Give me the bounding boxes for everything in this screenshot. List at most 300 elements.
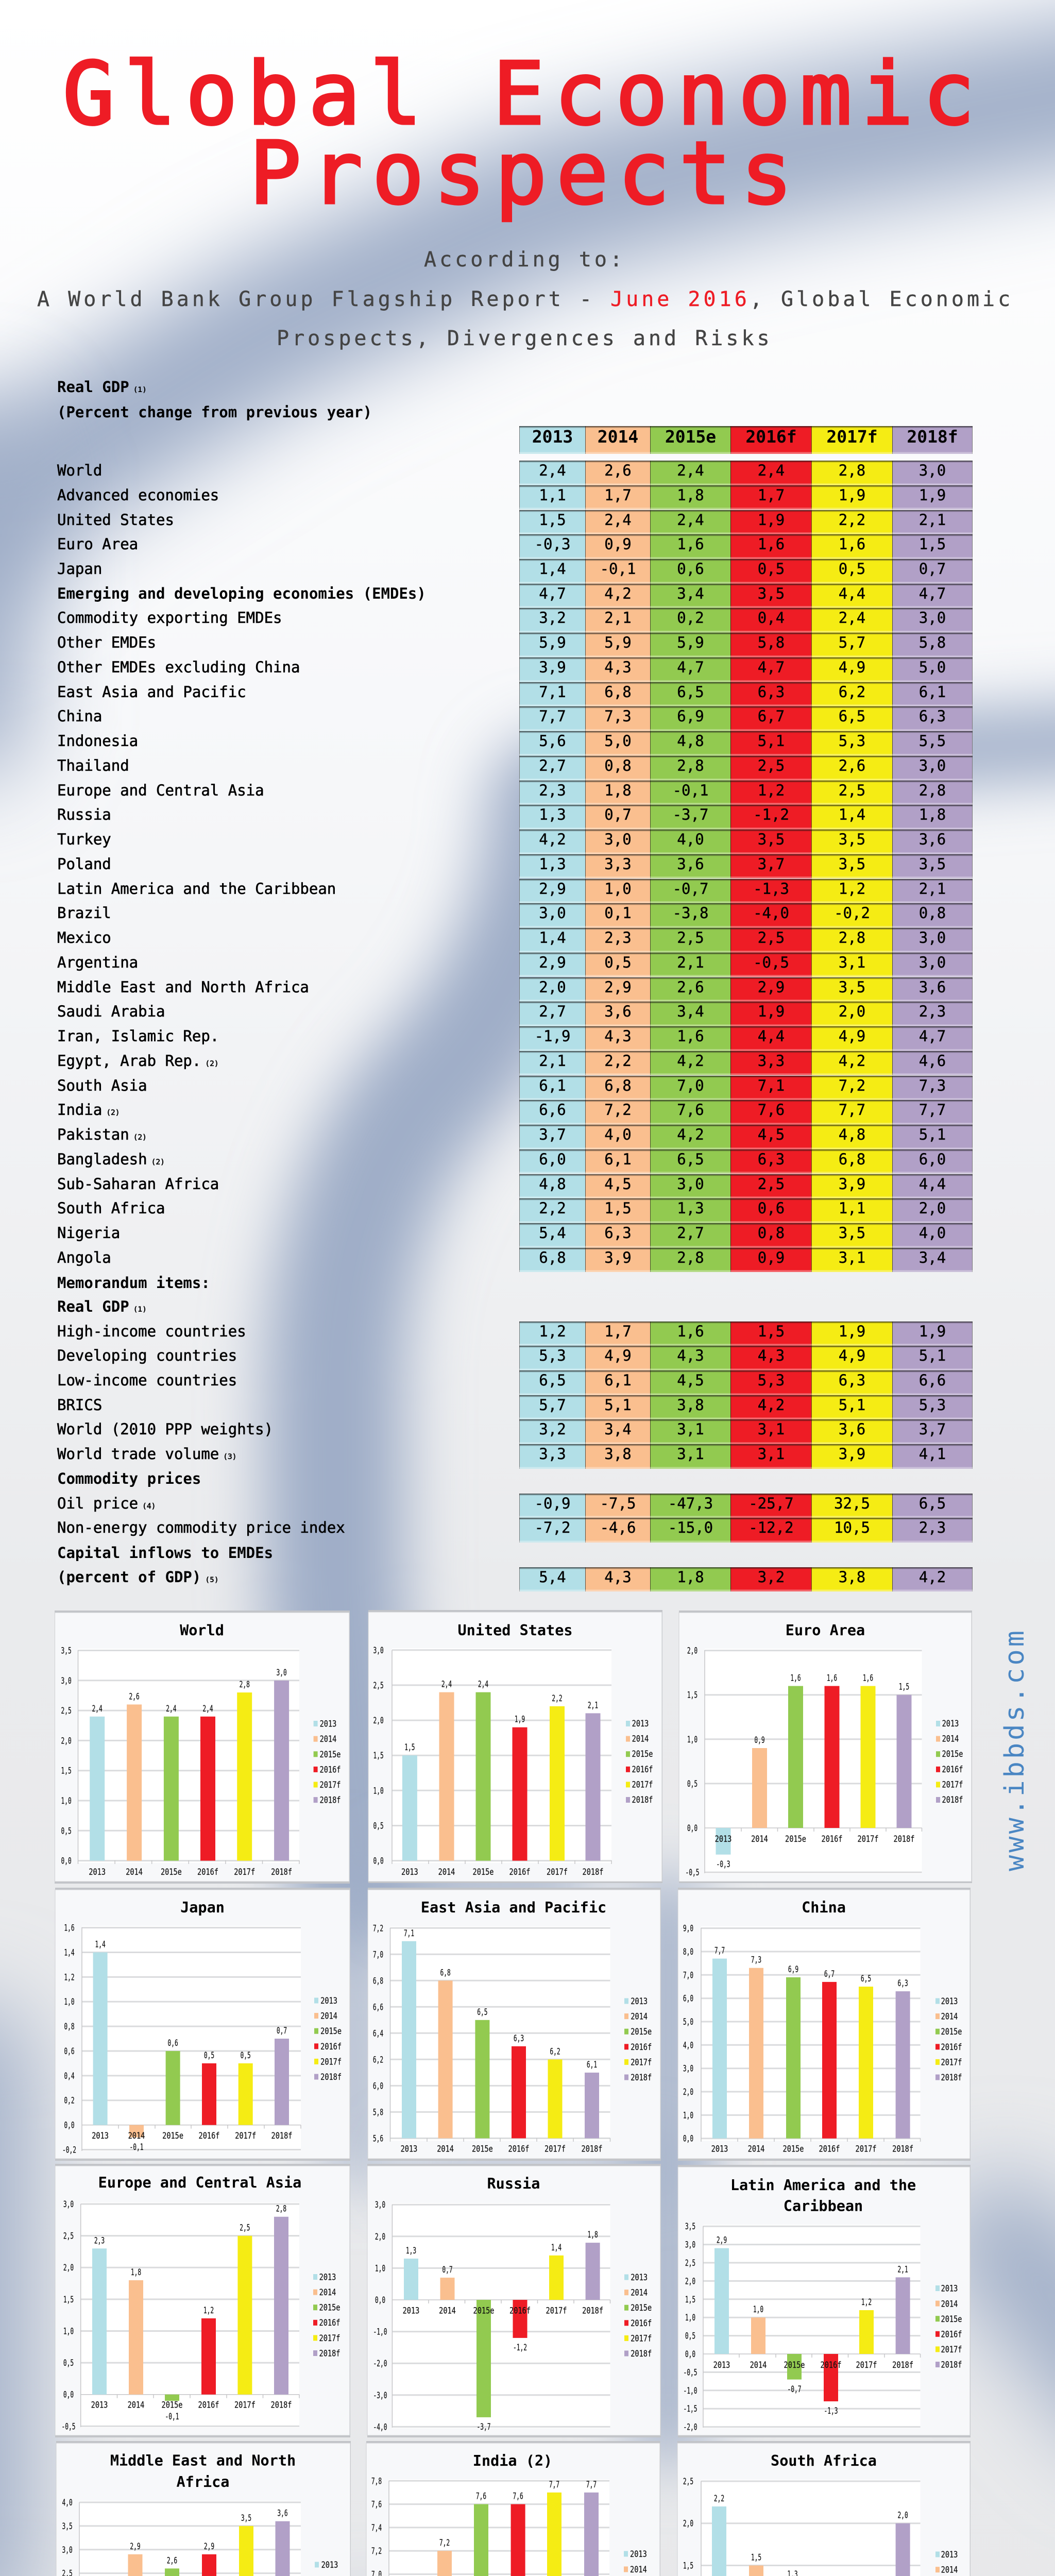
- row: Japan: 1,4: [539, 560, 566, 578]
- row: Brazil: 0,8: [919, 904, 946, 922]
- value labels: [714, 2494, 908, 2576]
- row: Europe and Central Asia: 1,2: [758, 782, 785, 799]
- row: China: 6,9: [677, 707, 704, 725]
- row: BRICS: 4,2: [758, 1396, 785, 1414]
- row: Saudi Arabia: Saudi Arabia: [57, 1003, 165, 1020]
- title: [63, 44, 984, 224]
- row: Thailand: 2,5: [758, 757, 785, 774]
- row: Latin America and the Caribbean: 1,0: [604, 880, 632, 897]
- title: Prospects: [249, 124, 802, 224]
- row: World PPP weights: 3,1: [758, 1420, 785, 1438]
- axis labels: 1,0: [373, 1786, 384, 1796]
- row: Advanced economies: 1,7: [604, 486, 632, 504]
- row: Saudi Arabia: 3,4: [677, 1003, 704, 1020]
- axis labels: 2017f: [856, 2360, 877, 2370]
- axis labels: -2,0: [373, 2359, 387, 2369]
- axis labels: 0,5: [685, 2331, 695, 2341]
- row: Bangladesh: Bangladesh (2): [57, 1150, 165, 1168]
- row: Emerging and developing economies: [57, 584, 973, 608]
- value labels: 7,1: [404, 1929, 414, 1939]
- row: Indonesia: 5,6: [539, 732, 566, 750]
- row: Iran: 4,4: [758, 1027, 785, 1045]
- row: Middle East and North Africa: [57, 977, 973, 1002]
- axis labels: 6,4: [373, 2029, 383, 2039]
- legend: 2018f: [320, 2072, 342, 2082]
- value labels: 0,9: [754, 1736, 765, 1745]
- axis labels: 2014: [437, 2144, 454, 2154]
- value labels: [714, 1946, 908, 1989]
- row: Developing countries: 5,3: [539, 1347, 566, 1364]
- legend: 2016f: [320, 2041, 342, 2052]
- row: Non-energy commodity price index: Non-energy commodity price index: [57, 1519, 345, 1536]
- chart: Europe and Central Asia: Europe and Central Asia: [98, 2174, 301, 2191]
- row: Poland: 1,3: [539, 855, 566, 873]
- row: Other EMDEs excluding China: 4,7: [677, 658, 704, 676]
- legend: 2015e: [631, 2027, 652, 2037]
- axis labels: [373, 1924, 602, 2154]
- row: Mexico: [57, 928, 973, 953]
- chart: Japan: Japan: [180, 1899, 225, 1916]
- row: Euro Area: 1,6: [839, 535, 865, 553]
- axis labels: 2,5: [685, 2259, 695, 2268]
- axis labels: 2016f: [199, 2131, 219, 2141]
- row: High-income countries: 1,9: [919, 1323, 946, 1340]
- row: Low-income countries: 6,1: [604, 1371, 632, 1389]
- row: Oil price: [57, 1493, 973, 1518]
- axis labels: 2015e: [161, 1867, 182, 1877]
- axis labels: 2018f: [892, 2144, 913, 2154]
- axis labels: [62, 2200, 292, 2432]
- axis labels: 2017f: [547, 1867, 568, 1877]
- row: Low-income countries: [57, 1370, 973, 1395]
- value labels: 1,4: [551, 2243, 561, 2253]
- value labels: 7,7: [586, 2480, 597, 2490]
- value labels: 1,9: [515, 1715, 525, 1724]
- axis labels: 5,0: [683, 2018, 693, 2027]
- row: Pakistan: Pakistan (2): [57, 1126, 147, 1143]
- row: Advanced economies: 1,7: [758, 486, 785, 504]
- row: Advanced economies: 1,8: [677, 486, 704, 504]
- value labels: 2,4: [166, 1704, 177, 1714]
- value labels: 2,4: [441, 1680, 452, 1689]
- axis labels: 2,0: [683, 2088, 693, 2097]
- axis labels: -0,5: [62, 2422, 75, 2432]
- row: Japan: 0,6: [677, 560, 704, 578]
- row: Oil price: -47,3: [668, 1494, 713, 1512]
- row: East Asia and Pacific: East Asia and Pacific: [57, 683, 246, 701]
- axis labels: -1,5: [684, 2404, 697, 2414]
- value labels: 2,1: [588, 1701, 598, 1710]
- value labels: 3,6: [277, 2509, 288, 2518]
- row: Oil price: 6,5: [919, 1494, 946, 1512]
- axis labels: 2015e: [785, 1834, 806, 1844]
- row: Indonesia: 5,5: [919, 732, 946, 750]
- row: Commodity exporting EMDEs: [57, 608, 973, 633]
- row: Emerging and developing economies: 4,4: [839, 585, 865, 602]
- row: China: 7,3: [604, 707, 632, 725]
- value labels: 2,9: [717, 2236, 727, 2245]
- bars: [714, 2248, 910, 2401]
- legend: 2014: [941, 2011, 958, 2022]
- axis labels: [62, 2498, 293, 2576]
- value labels: [93, 2509, 288, 2576]
- row: Other EMDEs excluding China: 3,9: [539, 658, 566, 676]
- value labels: -0,7: [788, 2385, 801, 2395]
- title: Global Economic: [63, 44, 984, 144]
- row: Other EMDEs excluding China: 4,3: [604, 658, 632, 676]
- axis labels: 0,0: [683, 2134, 693, 2144]
- legend: [315, 2560, 342, 2576]
- value labels: -1,2: [513, 2343, 527, 2353]
- row: Commodity exporting EMDEs: 0,2: [677, 609, 704, 626]
- legend: 2018f: [631, 2073, 652, 2082]
- axis labels: 2016f: [508, 2144, 529, 2154]
- legend: 2013: [319, 2272, 336, 2282]
- row: China: 6,5: [839, 707, 865, 725]
- axis labels: 2013: [715, 1834, 731, 1844]
- row: Euro Area: 1,6: [677, 535, 704, 553]
- chart: Middle East and North Africa: Middle East and North: [110, 2452, 296, 2469]
- chart: United States: [368, 1610, 662, 1883]
- row: World PPP weights: 3,1: [677, 1420, 704, 1438]
- bars: [91, 2521, 290, 2576]
- legend: 2014: [631, 2287, 648, 2298]
- legend: 2018f: [941, 2073, 962, 2082]
- value labels: [717, 1673, 909, 1870]
- bars: [90, 1681, 289, 1861]
- value labels: 1,5: [404, 1743, 415, 1753]
- row: South Asia: 6,8: [604, 1077, 632, 1094]
- legend: 2015e: [941, 2027, 962, 2037]
- row: World PPP weights: 3,4: [604, 1420, 632, 1438]
- row: Oil price: -25,7: [748, 1494, 794, 1512]
- row: Poland: 3,5: [839, 855, 865, 873]
- axis labels: 6,6: [373, 2003, 383, 2012]
- legend: 2015e: [631, 2303, 652, 2313]
- row: Turkey: 4,2: [539, 831, 566, 848]
- row: Europe and Central Asia: 2,5: [839, 782, 865, 799]
- row: World: 2,4: [758, 462, 785, 479]
- axis labels: 1,2: [64, 1973, 75, 1982]
- axis labels: 2018f: [894, 1834, 914, 1844]
- axis labels: -4,0: [373, 2422, 387, 2432]
- legend: 2017f: [941, 2057, 962, 2067]
- row: Latin America and the Caribbean: Latin America and the Caribbean: [57, 880, 336, 897]
- axis labels: 1,5: [61, 1767, 72, 1776]
- axis labels: 2017f: [858, 1834, 878, 1844]
- legend: 2015e: [320, 2026, 342, 2037]
- table header: years: 2016f: [745, 427, 797, 447]
- legend: [935, 2283, 962, 2370]
- row: Russia: -3,7: [673, 806, 708, 823]
- axis labels: -1,0: [684, 2386, 697, 2396]
- row: Sub-Saharan Africa: 2,5: [758, 1175, 785, 1192]
- axis labels: 1,6: [64, 1923, 75, 1933]
- axis labels: 8,0: [683, 1947, 693, 1957]
- axis labels: 2018f: [271, 1867, 292, 1877]
- row: World PPP weights: 3,6: [839, 1420, 865, 1438]
- axis labels: 2014: [439, 2306, 456, 2316]
- row: World: World: [57, 462, 102, 479]
- axis labels: 3,0: [62, 2546, 73, 2555]
- legend: [935, 2550, 962, 2576]
- axis labels: [373, 2200, 603, 2432]
- axis labels: 9,0: [683, 1924, 693, 1934]
- row: World: 2,4: [677, 462, 704, 479]
- axis labels: 0,5: [61, 1826, 72, 1836]
- chart: World: [55, 1611, 350, 1884]
- row: Latin America and the Caribbean: [57, 879, 973, 903]
- row: India: 7,6: [758, 1101, 785, 1118]
- axis labels: 1,0: [61, 1797, 72, 1806]
- row: Iran: Iran, Islamic Rep.: [57, 1027, 219, 1045]
- axis labels: [683, 2477, 913, 2576]
- value labels: 2,3: [94, 2236, 105, 2246]
- row: Indonesia: 5,0: [604, 732, 632, 750]
- row: South Africa: [57, 1198, 973, 1223]
- chart: Europe and Central Asia: [55, 2164, 350, 2437]
- chart: Russia: [367, 2164, 661, 2437]
- row: South Asia: South Asia: [57, 1077, 147, 1094]
- row: Advanced economies: 1,9: [839, 486, 865, 504]
- row: Euro Area: 1,5: [919, 535, 946, 553]
- row: Euro Area: Euro Area: [57, 535, 138, 553]
- row: Egypt: 2,2: [604, 1052, 632, 1070]
- legend: 2013: [632, 1719, 649, 1728]
- row: United States: 2,4: [677, 511, 704, 529]
- row: Non-energy commodity price index: -15,0: [668, 1519, 713, 1536]
- axis labels: 2014: [128, 2131, 145, 2141]
- table heading: Real GDP: (Percent change from previous year): [57, 403, 372, 421]
- row: Other EMDEs: [57, 633, 973, 657]
- value labels: 1,6: [863, 1673, 873, 1683]
- row: Non-energy commodity price index: -4,6: [600, 1519, 636, 1536]
- value labels: 6,3: [897, 1979, 908, 1989]
- chart: Russia: Russia: [487, 2175, 540, 2192]
- axis labels: 4,0: [683, 2041, 693, 2050]
- row: Iran: 1,6: [677, 1027, 704, 1045]
- row: Thailand: Thailand: [57, 757, 129, 774]
- bars: [712, 2506, 910, 2576]
- axis labels: 3,0: [685, 2240, 695, 2250]
- row: Russia: 0,7: [604, 806, 632, 823]
- row: East Asia and Pacific: 6,2: [839, 683, 865, 701]
- legend: 2014: [320, 1734, 336, 1744]
- value labels: 2,2: [552, 1694, 563, 1704]
- legend: 2018f: [941, 2360, 962, 2370]
- axis labels: 2018f: [271, 2131, 292, 2141]
- chart: Euro Area: [679, 1611, 972, 1883]
- row: East Asia and Pacific: 6,3: [758, 683, 785, 701]
- row: Indonesia: 5,3: [839, 732, 865, 750]
- value labels: 1,6: [790, 1673, 801, 1683]
- value labels: 2,4: [202, 1704, 213, 1714]
- row: Japan: [57, 559, 973, 584]
- axis labels: 2,0: [375, 2232, 385, 2242]
- legend: 2013: [941, 1996, 958, 2006]
- axis labels: 0,0: [687, 1824, 697, 1834]
- value labels: 1,4: [95, 1940, 106, 1950]
- value labels: 3,5: [241, 2514, 251, 2523]
- row: World trade volume: [57, 1444, 973, 1469]
- axis labels: 2017f: [234, 2400, 256, 2410]
- axis labels: 7,6: [371, 2500, 382, 2510]
- row: Middle East and North Africa: 2,0: [539, 978, 566, 995]
- axis labels: 2,0: [683, 2519, 693, 2529]
- row: Commodity exporting EMDEs: Commodity exporting EMDEs: [57, 609, 282, 626]
- row: Bangladesh: 6,5: [677, 1150, 704, 1168]
- value labels: [95, 1940, 287, 2153]
- row: Iran: 4,7: [919, 1027, 946, 1045]
- axis labels: 1,5: [63, 2295, 74, 2305]
- row: Europe and Central Asia: 2,8: [919, 782, 946, 799]
- axis labels: 2015e: [162, 2400, 182, 2410]
- value labels: [94, 2205, 286, 2422]
- value labels: -3,7: [477, 2422, 490, 2432]
- value labels: [92, 1668, 287, 1714]
- axis labels: 5,6: [373, 2134, 383, 2144]
- row: Poland: 3,3: [604, 855, 632, 873]
- row: South Africa: South Africa: [57, 1199, 165, 1217]
- legend: 2014: [319, 2287, 336, 2297]
- chart: Middle East and North Africa: Africa: [177, 2473, 229, 2490]
- row: World trade volume: World trade volume (3): [57, 1445, 236, 1463]
- row: India: 7,6: [677, 1101, 704, 1118]
- axis labels: 2,0: [63, 2263, 74, 2273]
- axis labels: 2017f: [544, 2144, 566, 2154]
- legend: 2015e: [632, 1749, 653, 1759]
- row: Emerging and developing economies: 3,4: [677, 585, 704, 602]
- row: Thailand: [57, 756, 973, 781]
- value labels: 7,3: [751, 1956, 761, 1965]
- axis labels: 2,0: [373, 1716, 384, 1726]
- legend: 2013: [630, 2549, 647, 2559]
- row: East Asia and Pacific: 7,1: [539, 683, 566, 701]
- row: Pakistan: 4,0: [604, 1126, 632, 1143]
- axis labels: 2016f: [819, 2144, 840, 2154]
- axis labels: 2016f: [509, 2306, 531, 2316]
- row: Advanced economies: 1,1: [539, 486, 566, 504]
- axis labels: 1,0: [685, 2313, 695, 2323]
- row: High-income countries: 1,7: [604, 1323, 632, 1340]
- bars: [404, 2243, 600, 2417]
- row: Argentina: Argentina: [57, 954, 138, 971]
- legend: 2014: [631, 2011, 648, 2022]
- legend: 2016f: [631, 2318, 652, 2328]
- row: Commodity exporting EMDEs: 3,0: [919, 609, 946, 626]
- legend: 2017f: [320, 2057, 342, 2067]
- row: Middle East and North Africa: Middle East and North Africa: [57, 978, 309, 995]
- heading: Real GDP memo: Real GDP (1): [57, 1297, 147, 1315]
- row: Bangladesh: 6,1: [604, 1150, 632, 1168]
- row: Commodity exporting EMDEs: 2,4: [839, 609, 865, 626]
- row: Commodity exporting EMDEs: 0,4: [758, 609, 785, 626]
- chart: United States: United States: [457, 1622, 573, 1639]
- row: Thailand: 2,6: [839, 757, 865, 774]
- axis labels: 1,0: [64, 1997, 75, 2007]
- row: India: 7,2: [604, 1101, 632, 1118]
- legend: 2017f: [320, 1780, 341, 1790]
- axis labels: 2018f: [582, 2306, 603, 2316]
- row: United States: 2,1: [919, 511, 946, 529]
- axis labels: 2018f: [582, 2144, 602, 2154]
- chart: Latin America and the Caribbean: Caribbean: [784, 2198, 863, 2215]
- legend: 2017f: [941, 2345, 962, 2355]
- row: Egypt: 4,2: [839, 1052, 865, 1070]
- row: Turkey: 3,5: [839, 831, 865, 848]
- axis labels: 3,0: [63, 2200, 74, 2210]
- axis labels: [686, 1646, 914, 1878]
- value labels: 1,3: [406, 2246, 416, 2256]
- heading: Memorandum items: Memorandum items:: [57, 1274, 210, 1291]
- legend: 2018f: [632, 1795, 653, 1805]
- value labels: 2,9: [204, 2542, 214, 2552]
- row: Poland: 3,7: [758, 855, 785, 873]
- row: Thailand: 2,7: [539, 757, 566, 774]
- row: Turkey: 3,5: [758, 831, 785, 848]
- row: Advanced economies: Advanced economies: [57, 486, 219, 504]
- row: Developing countries: [57, 1346, 973, 1370]
- axis labels: 6,0: [683, 1994, 693, 2004]
- row: South Africa: 0,6: [758, 1199, 785, 1217]
- row: Thailand: 3,0: [919, 757, 946, 774]
- row: Euro Area: [57, 534, 973, 559]
- axis labels: 2014: [751, 1834, 768, 1844]
- axis labels: 2016f: [509, 1867, 530, 1877]
- row: Turkey: [57, 829, 973, 854]
- row: Emerging and developing economies: 3,5: [758, 585, 785, 602]
- axis labels: 3,0: [375, 2200, 385, 2210]
- row: Argentina: 2,9: [539, 954, 566, 971]
- axis labels: 0,5: [687, 1780, 697, 1789]
- row: Nigeria: [57, 1223, 973, 1248]
- row: Russia: -1,2: [753, 806, 789, 823]
- row: World trade volume: 3,1: [758, 1445, 785, 1463]
- chart: Latin America and the Caribbean: [678, 2165, 971, 2437]
- row: Iran: 4,9: [839, 1027, 865, 1045]
- legend: 2014: [942, 1734, 959, 1744]
- axis labels: [62, 1923, 292, 2155]
- axis labels: 4,0: [62, 2498, 73, 2508]
- row: Brazil: 0,1: [604, 904, 632, 922]
- axis labels: 3,0: [683, 2064, 693, 2074]
- axis labels: 7,8: [371, 2477, 382, 2486]
- row: Latin America and the Caribbean: 2,1: [919, 880, 946, 897]
- row: Europe and Central Asia: 1,8: [604, 782, 632, 799]
- value labels: 6,2: [550, 2047, 560, 2057]
- row: Egypt: 2,1: [539, 1052, 566, 1070]
- axis labels: 6,8: [373, 1976, 383, 1986]
- axis labels: 2013: [401, 2144, 417, 2154]
- row: Turkey: 4,0: [677, 831, 704, 848]
- row: Nigeria: Nigeria: [57, 1224, 120, 1242]
- row: Euro Area: 0,9: [604, 535, 632, 553]
- row: Commodity exporting EMDEs: 3,2: [539, 609, 566, 626]
- value labels: 6,9: [788, 1965, 798, 1975]
- chart: Latin America and the Caribbean: Latin America and the: [730, 2177, 916, 2194]
- value labels: 6,8: [440, 1968, 451, 1978]
- axis labels: -2,0: [684, 2422, 697, 2432]
- row: Bangladesh: [57, 1149, 973, 1174]
- axis labels: 2017f: [856, 2144, 876, 2154]
- legend: 2015e: [941, 2314, 962, 2324]
- row: South Asia: 7,0: [677, 1077, 704, 1094]
- legend: 2015e: [319, 2302, 340, 2313]
- row: Mexico: 2,5: [758, 929, 785, 946]
- axis labels: 6,0: [373, 2081, 383, 2091]
- bars: [92, 2217, 288, 2401]
- row: percent of GDP: [57, 1567, 973, 1591]
